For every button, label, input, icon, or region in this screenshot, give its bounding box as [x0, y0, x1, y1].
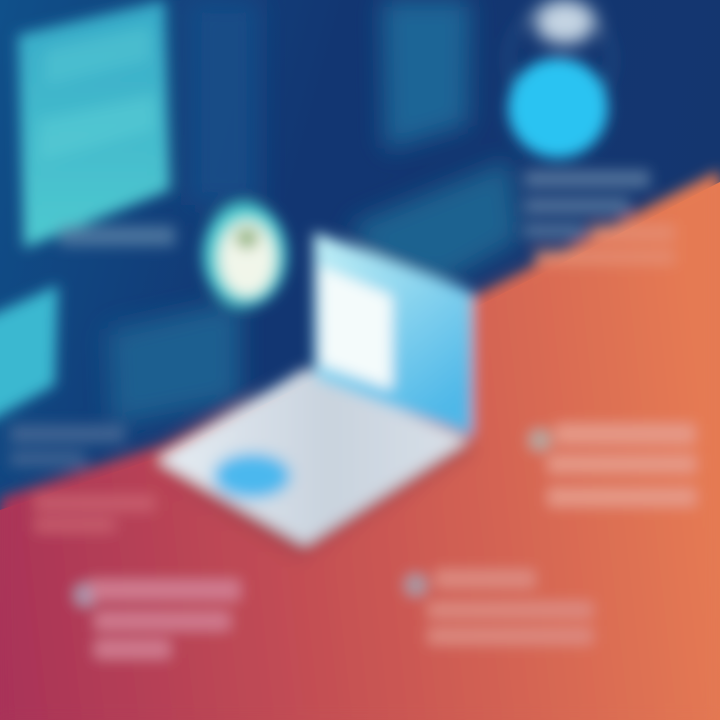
panel: dark blue card left centre: [108, 300, 240, 425]
panel: dark blue column: [188, 0, 260, 205]
laptop base: [158, 368, 468, 545]
laptop touchpad: [214, 454, 290, 498]
laptop screen white panel: [320, 266, 392, 390]
background: coral gradient lower area: [0, 170, 720, 720]
text block: caption lower left on navy: [10, 425, 125, 466]
text block: caption under globe: [525, 170, 650, 238]
panel: teal card left edge: [0, 285, 58, 432]
panel: wide dark teal strip: [350, 160, 520, 285]
panel: blue column top centre: [382, 0, 470, 150]
icon: globe with pin: [508, 0, 612, 158]
text block: coral caption lower left: [35, 495, 155, 532]
laptop shadow: [165, 425, 475, 558]
icon: round badge: [203, 203, 287, 307]
background: unblurred coral underlay: [0, 182, 720, 720]
text block: coral caption upper right: [535, 225, 675, 264]
text block: right feature: [529, 424, 696, 506]
panel: teal document top left: [18, 0, 175, 248]
laptop screen: [314, 232, 472, 436]
illustration: laptop: [158, 232, 475, 558]
text block: left feature: [75, 580, 240, 658]
text block: centre feature: [405, 570, 593, 644]
